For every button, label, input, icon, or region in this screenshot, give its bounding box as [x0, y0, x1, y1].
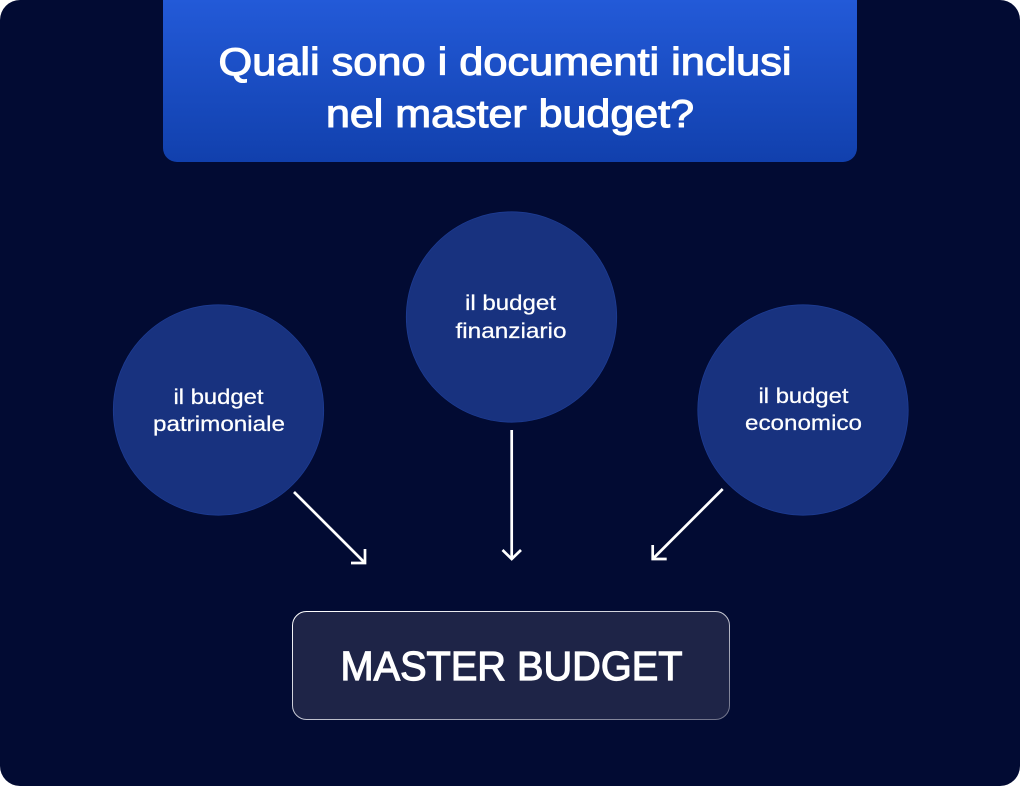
circle: il budget economico: il budget [758, 384, 849, 408]
master budget box: MASTER BUDGET [340, 643, 682, 689]
title banner [163, 0, 857, 162]
title text: Quali sono i documenti inclusi [218, 41, 792, 84]
master budget box [292, 612, 730, 720]
title text: nel master budget? [326, 93, 694, 136]
circle: il budget economico [698, 305, 908, 515]
circle: il budget finanziario [406, 212, 617, 422]
circle: il budget patrimoniale [113, 305, 324, 515]
circle: il budget economico: economico [745, 411, 862, 435]
circle: il budget finanziario: il budget [465, 291, 556, 315]
title text [218, 41, 792, 136]
circle: il budget patrimoniale: il budget [174, 385, 264, 409]
arrow: patrimoniale to master budget [294, 492, 365, 563]
arrow: finanziario to master budget [502, 430, 521, 559]
circle: il budget finanziario: finanziario [456, 319, 567, 343]
arrow: economico to master budget [653, 489, 723, 559]
circle: il budget patrimoniale: patrimoniale [153, 412, 285, 436]
